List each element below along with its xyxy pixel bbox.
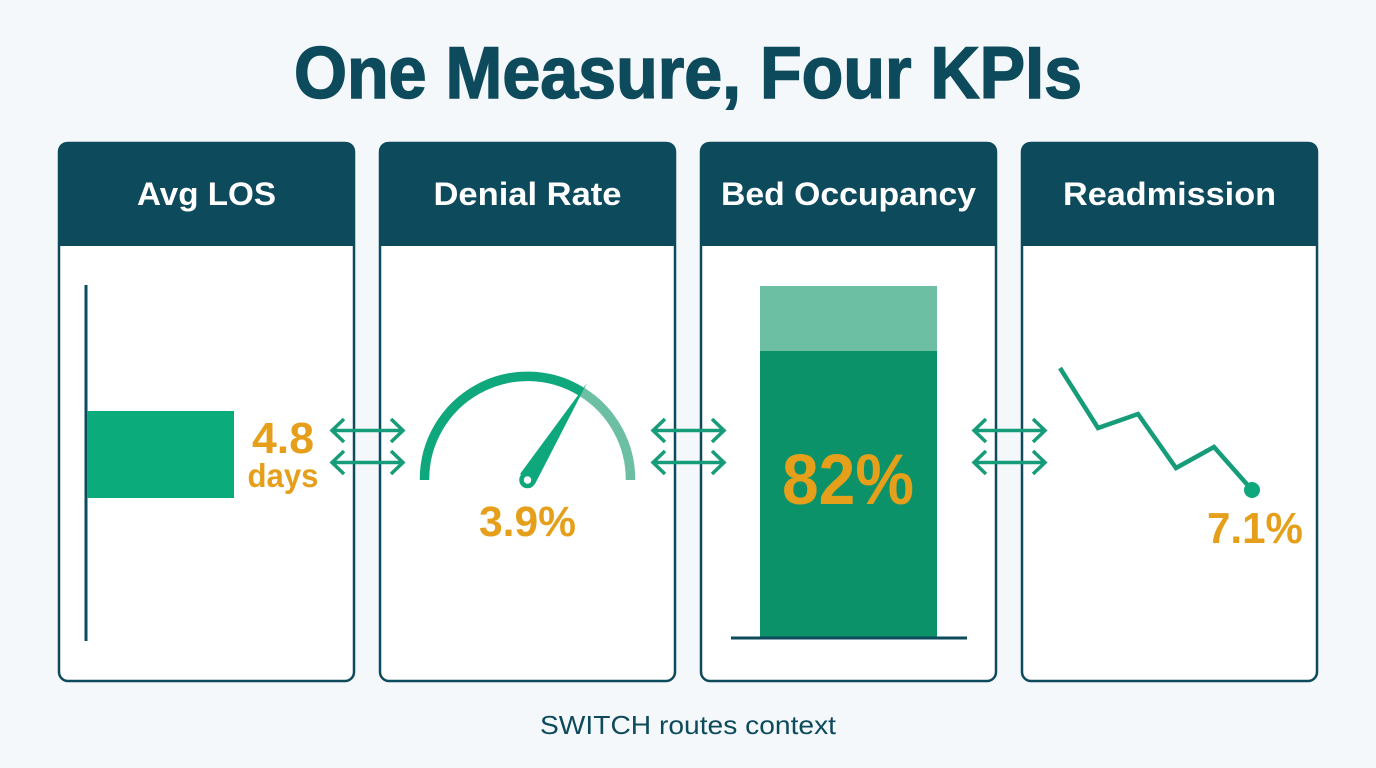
heading: Avg LOS: Avg LOS xyxy=(137,176,276,212)
gauge chart xyxy=(424,376,631,486)
value: 4.8 days: days xyxy=(248,457,318,494)
value: 82%: 82% xyxy=(782,441,914,520)
arrows: Avg LOS to Denial Rate xyxy=(332,419,403,474)
heading: Bed Occupancy: Bed Occupancy xyxy=(721,176,976,212)
bar chart: length of stay xyxy=(86,285,234,641)
value: 7.1%: 7.1% xyxy=(1207,504,1303,553)
value: 4.8 days xyxy=(248,414,318,494)
panel: Readmission xyxy=(1021,142,1318,681)
stacked bar: occupancy xyxy=(731,286,967,638)
panel: Denial Rate xyxy=(379,142,676,681)
arrows: Denial Rate to Bed Occupancy xyxy=(653,419,724,474)
heading: Denial Rate: Denial Rate xyxy=(434,176,622,212)
footer caption: SWITCH routes context xyxy=(540,710,837,740)
panel: Avg LOS xyxy=(58,142,355,681)
panel: Bed Occupancy xyxy=(700,142,997,681)
arrows: Bed Occupancy to Readmission xyxy=(974,419,1045,474)
value: 4.8 days: 4.8 xyxy=(252,414,314,463)
title: One Measure, Four KPIs xyxy=(294,33,1082,114)
value: 3.9%: 3.9% xyxy=(479,498,576,546)
heading: Readmission: Readmission xyxy=(1063,176,1276,212)
line chart: readmission trend xyxy=(1060,368,1260,498)
